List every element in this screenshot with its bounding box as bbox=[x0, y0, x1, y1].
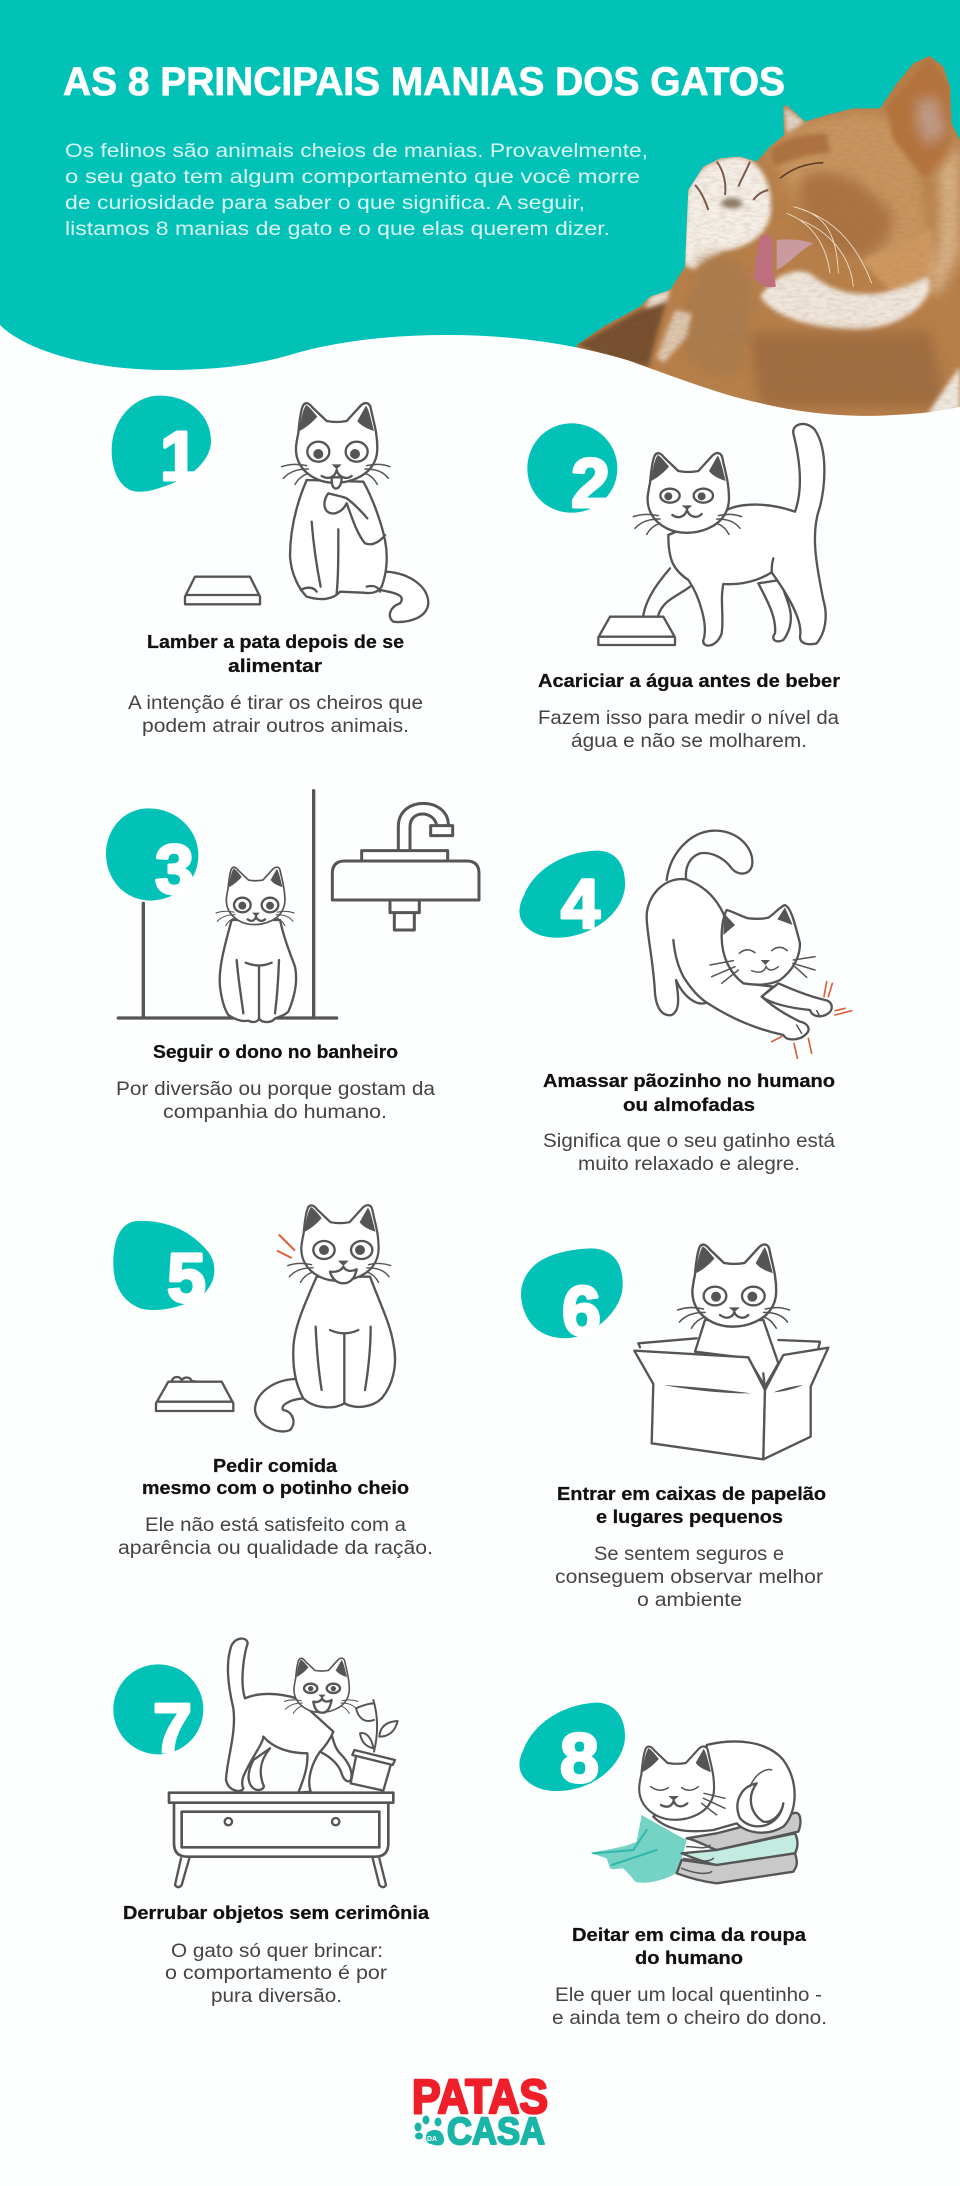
cat 2 illustration bbox=[633, 424, 826, 646]
sink and faucet bbox=[332, 803, 479, 930]
description 1: A intenção é tirar os cheiros que bbox=[128, 693, 423, 714]
logo: Patas da Casa: PATAS bbox=[412, 2071, 548, 2124]
item 6: cardboard boxes: o ambiente bbox=[637, 1590, 742, 1611]
item 7: knocking objects over: 7 bbox=[153, 1689, 192, 1767]
cat 4 illustration bbox=[647, 831, 852, 1058]
cat 1 illustration bbox=[282, 403, 428, 622]
cat 6 in a box illustration bbox=[634, 1245, 828, 1459]
intro text: Os felinos são animais cheios de manias. Provavelmente, bbox=[65, 140, 648, 162]
item 5: asking for food: mesmo com o potinho cheio bbox=[142, 1477, 409, 1498]
item 6: cardboard boxes bbox=[521, 1245, 828, 1611]
item 7: knocking objects over: o comportamento é por bbox=[165, 1963, 388, 1984]
heading 7: Derrubar objetos sem cerimônia bbox=[123, 1902, 430, 1923]
cat 8 on clothes illustration bbox=[590, 1741, 800, 1883]
photo: ginger cat licking paw bbox=[576, 56, 960, 416]
intro text: listamos 8 manias de gato e o que elas querem dizer. bbox=[65, 218, 610, 240]
logo: Patas da Casa: CASA bbox=[447, 2111, 545, 2153]
logo: Patas da Casa bbox=[412, 2071, 548, 2153]
heading 1: Lamber a pata depois de se bbox=[147, 631, 404, 652]
number 1 badge bbox=[112, 396, 211, 492]
item 4: kneading: muito relaxado e alegre. bbox=[578, 1154, 800, 1175]
item 3: following owner to the bathroom: companhia do humano. bbox=[163, 1102, 387, 1123]
heading 4: Amassar pãozinho no humano bbox=[543, 1070, 835, 1091]
description 5: Ele não está satisfeito com a bbox=[145, 1515, 406, 1536]
number 6 badge bbox=[521, 1248, 623, 1338]
item 4: kneading bbox=[519, 831, 852, 1175]
intro text: de curiosidade para saber o que significa. A seguir, bbox=[65, 192, 585, 214]
item 5: asking for food: 5 bbox=[167, 1239, 206, 1317]
bowl 2 bbox=[598, 617, 675, 645]
item 7: knocking objects over bbox=[113, 1639, 430, 2007]
item 2: patting the water bbox=[527, 423, 840, 752]
bowl with food bbox=[156, 1377, 233, 1411]
item 3: following owner to the bathroom bbox=[106, 791, 479, 1123]
item 4: kneading: ou almofadas bbox=[623, 1094, 755, 1115]
item 6: cardboard boxes: conseguem observar melhor bbox=[555, 1567, 824, 1588]
item 8: lying on clothes: do humano bbox=[635, 1947, 743, 1968]
description 8: Ele quer um local quentinho - bbox=[555, 1985, 822, 2006]
cat 3 illustration bbox=[216, 867, 296, 1022]
number 4 badge bbox=[519, 851, 625, 938]
description 6: Se sentem seguros e bbox=[594, 1544, 784, 1565]
item 1: licking paw after eating: 1 bbox=[160, 417, 199, 495]
cat 5 illustration bbox=[255, 1205, 395, 1431]
description 7: O gato só quer brincar: bbox=[171, 1941, 383, 1962]
item 5: asking for food: aparência ou qualidade da ração. bbox=[118, 1538, 433, 1559]
title: AS 8 PRINCIPAIS MANIAS DOS GATOS bbox=[63, 60, 785, 104]
item 1: licking paw after eating bbox=[112, 396, 428, 737]
item 7: knocking objects over: pura diversão. bbox=[211, 1986, 342, 2007]
item 2: patting the water: 2 bbox=[571, 444, 610, 522]
number 3 badge bbox=[106, 808, 198, 901]
item 8: lying on clothes: e ainda tem o cheiro do dono. bbox=[552, 2008, 827, 2029]
bathroom walls and floor bbox=[118, 791, 337, 1018]
heading 3: Seguir o dono no banheiro bbox=[153, 1041, 398, 1062]
heading 8: Deitar em cima da roupa bbox=[572, 1924, 807, 1945]
cat 7 on furniture illustration bbox=[169, 1639, 398, 1887]
heading 5: Pedir comida bbox=[213, 1455, 338, 1476]
number 2 badge bbox=[527, 423, 617, 513]
item 5: asking for food bbox=[113, 1205, 433, 1559]
plant bbox=[356, 1700, 398, 1752]
header: teal banner bbox=[0, 0, 960, 430]
item 6: cardboard boxes: 6 bbox=[562, 1272, 601, 1350]
heading 6: Entrar em caixas de papelão bbox=[557, 1483, 826, 1504]
heading 2: Acariciar a água antes de beber bbox=[538, 670, 840, 691]
number 7 badge bbox=[113, 1664, 203, 1754]
item 8: lying on clothes: 8 bbox=[560, 1719, 599, 1797]
item 8: lying on clothes bbox=[519, 1703, 827, 2029]
item 1: licking paw after eating: alimentar bbox=[228, 655, 322, 676]
description 2: Fazem isso para medir o nível da bbox=[538, 708, 839, 729]
intro text bbox=[65, 140, 648, 240]
bowl 1 bbox=[185, 577, 260, 604]
item 3: following owner to the bathroom: 3 bbox=[155, 830, 194, 908]
intro text: o seu gato tem algum comportamento que você morre bbox=[65, 166, 640, 188]
number 5 badge bbox=[113, 1221, 214, 1310]
item 6: cardboard boxes: e lugares pequenos bbox=[596, 1506, 783, 1527]
item 4: kneading: 4 bbox=[561, 865, 600, 943]
item 1: licking paw after eating: podem atrair outros animais. bbox=[142, 716, 409, 737]
description 4: Significa que o seu gatinho está bbox=[543, 1131, 835, 1152]
description 3: Por diversão ou porque gostam da bbox=[116, 1079, 435, 1100]
number 8 badge bbox=[519, 1703, 625, 1791]
icon: paw: DA bbox=[427, 2136, 437, 2143]
item 2: patting the water: água e não se molharem. bbox=[571, 731, 807, 752]
